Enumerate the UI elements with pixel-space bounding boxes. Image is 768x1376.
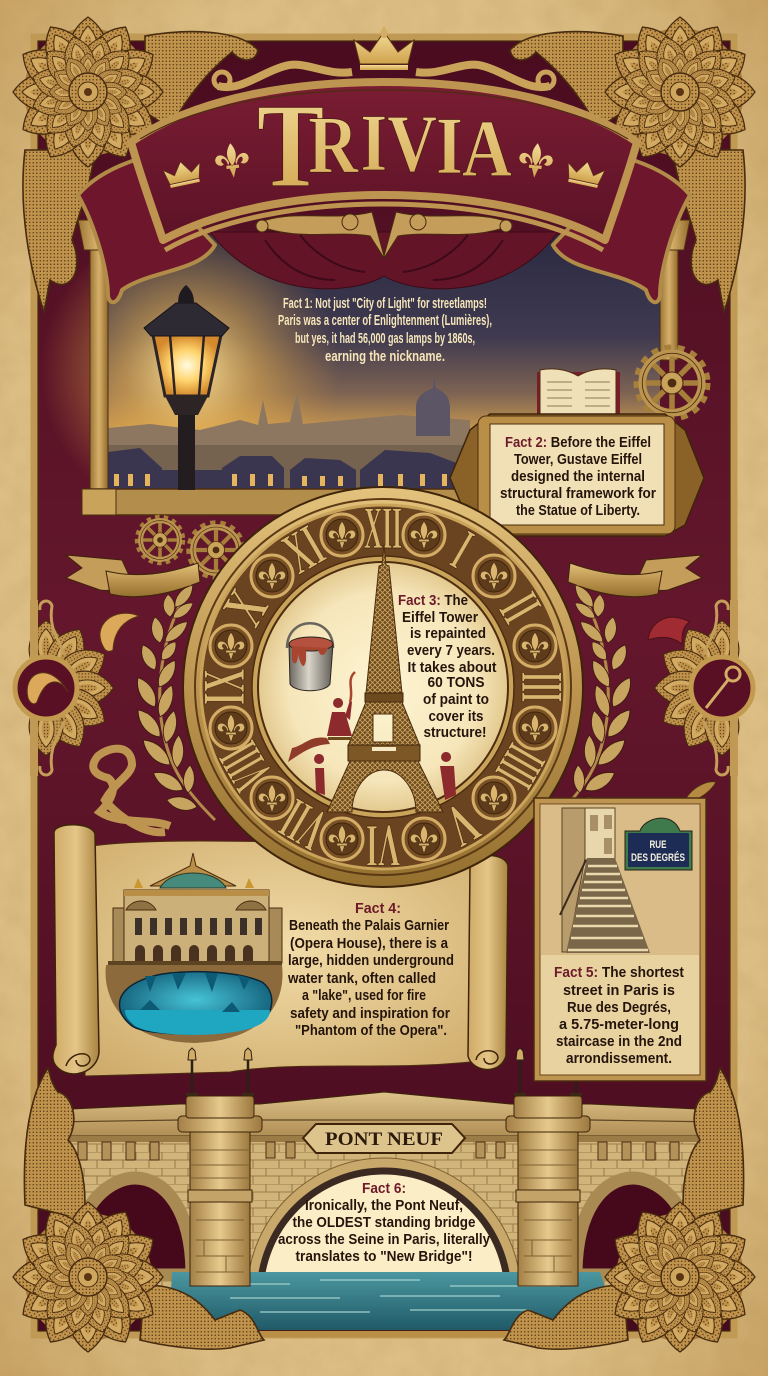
fact 3 text: every 7 years. [407,642,495,659]
fact 3 text: 60 TONS [428,674,484,691]
lamp posts [186,1048,582,1099]
street sign [625,818,692,870]
roman numerals: I [442,518,483,580]
fact 3 text: of paint to [423,691,489,708]
left tower [178,1096,262,1286]
plaque: PONT NEUF [325,1129,443,1150]
fact 2 panel [450,414,704,536]
gears under shelf [138,518,242,576]
ornament under banner [255,212,513,258]
bottom frame rail [250,1331,520,1337]
street sign: RUE [650,839,666,851]
fact 6 text: the OLDEST standing bridge [292,1214,476,1231]
fact 5 text: staircase in the 2nd [556,1033,682,1050]
fleurs-de-lis [214,142,554,180]
roman numerals [191,495,575,879]
red hat [648,617,690,644]
medallion with key [654,600,753,776]
fact 3 text: structure! [424,724,486,741]
fact 4 text [287,900,454,1039]
lamp glow [40,220,340,520]
roman numerals: VIII [206,732,284,801]
central arch [247,1158,521,1295]
fact 2 panel: Fact 2: Before the Eiffel [505,434,651,451]
eiffel tower [327,545,443,812]
top crown ornament [214,26,554,88]
gear [638,349,706,417]
fact 4 scroll [53,825,508,1076]
paint bucket [287,623,333,691]
fact 2 panel: the Statue of Liberty. [516,502,640,519]
banner [131,79,637,258]
fact 3 text: Eiffel Tower [402,609,478,626]
fact 4 text: "Phantom of the Opera". [295,1022,447,1039]
fact 3 text: cover its [428,708,484,725]
mandala: bottom right [578,1202,755,1376]
painters [288,672,456,800]
mandala: top left [0,17,163,194]
fact 2 panel: structural framework for [500,485,656,502]
plaque [303,1124,465,1153]
roman numerals: III [509,672,575,702]
open book [537,369,620,426]
fact 1 text: earning the nickname. [325,348,445,365]
underground lake [106,965,283,1043]
fact 2 panel: designed the internal [511,468,645,485]
left roll [53,825,99,1074]
fleur medallions [210,514,556,860]
water [170,1272,612,1330]
clock [183,487,583,887]
croissant [100,613,139,651]
fact 4 text: water tank, often called [287,970,436,987]
curtain [210,232,558,289]
roman numerals: XI [272,512,335,586]
lamp scene panel [40,220,660,520]
street lantern [144,285,229,490]
roman numerals: XII [364,495,402,561]
right tower [506,1096,590,1286]
title: T [257,79,324,212]
roman numerals: II [487,582,554,633]
fact 3 text: Fact 3: The [398,592,468,609]
mandala: bottom left [0,1202,163,1376]
fact 4 text: (Opera House), there is a [290,935,449,952]
roman numerals: VI [366,813,400,879]
wooden columns and shelf [78,220,690,515]
fact 1 text: Fact 1: Not just "City of Light" for streetlamps! [283,295,487,312]
fact 5 text: arrondissement. [566,1050,672,1067]
fact 5 text: Fact 5: The shortest [554,964,684,981]
fact 2 panel: Tower, Gustave Eiffel [514,451,642,468]
staircase scene [541,805,699,955]
fact 5 text: Rue des Degrés, [567,999,671,1016]
fact 5 text [554,964,684,1067]
roman numerals: IX [191,669,257,705]
fact 1 text: but yes, it had 56,000 gas lamps by 1860s, [295,330,475,347]
bottom paisleys [24,1068,744,1349]
fact 4 text: large, hidden underground [288,952,454,969]
fact 4 text: safety and inspiration for [290,1005,450,1022]
fact 1 text [278,295,492,365]
fact 6 text: translates to "New Bridge"! [296,1248,472,1265]
fact 6 text [278,1180,491,1265]
ribbons [66,555,702,597]
feathered hat [656,782,716,816]
side arches [80,1178,688,1275]
decorative ribbon [93,749,170,832]
fact 4 text: Beneath the Palais Garnier [289,917,449,934]
fact 6 text: across the Seine in Paris, literally [278,1231,491,1248]
palais garnier [108,853,282,965]
roman numerals: X [210,579,281,636]
street sign: DES DEGRÉS [631,851,685,864]
bridge masonry [50,1092,720,1290]
fact 6 text: Fact 6: [362,1180,406,1197]
fact 1 text: Paris was a center of Enlightenment (Lumières), [278,312,492,329]
title: RIVIA [308,99,512,194]
fact 5 text: street in Paris is [563,982,675,999]
medallion with croissant [15,600,114,776]
crowns [162,158,606,189]
fact 3 text: is repainted [410,625,486,642]
fact 5 card [534,798,706,1081]
fact 4 text: a "lake", used for fire [302,987,426,1004]
mandala: top right [578,17,755,194]
corner paisleys [23,32,745,312]
laurels [132,582,636,820]
fact 4 text: Fact 4: [355,900,401,917]
fact 6 text: Ironically, the Pont Neuf, [305,1197,463,1214]
roman numerals: V [435,790,490,860]
ribbon tails [78,160,690,302]
roman numerals: IIII [483,734,558,799]
fact 3 text [398,592,497,741]
fact 5 text: a 5.75-meter-long [559,1016,679,1033]
right roll [468,856,508,1070]
paris skyline [108,376,470,490]
pont neuf bridge [50,1048,720,1330]
fact 3 text: It takes about [408,659,497,676]
roman numerals: VII [270,786,337,863]
